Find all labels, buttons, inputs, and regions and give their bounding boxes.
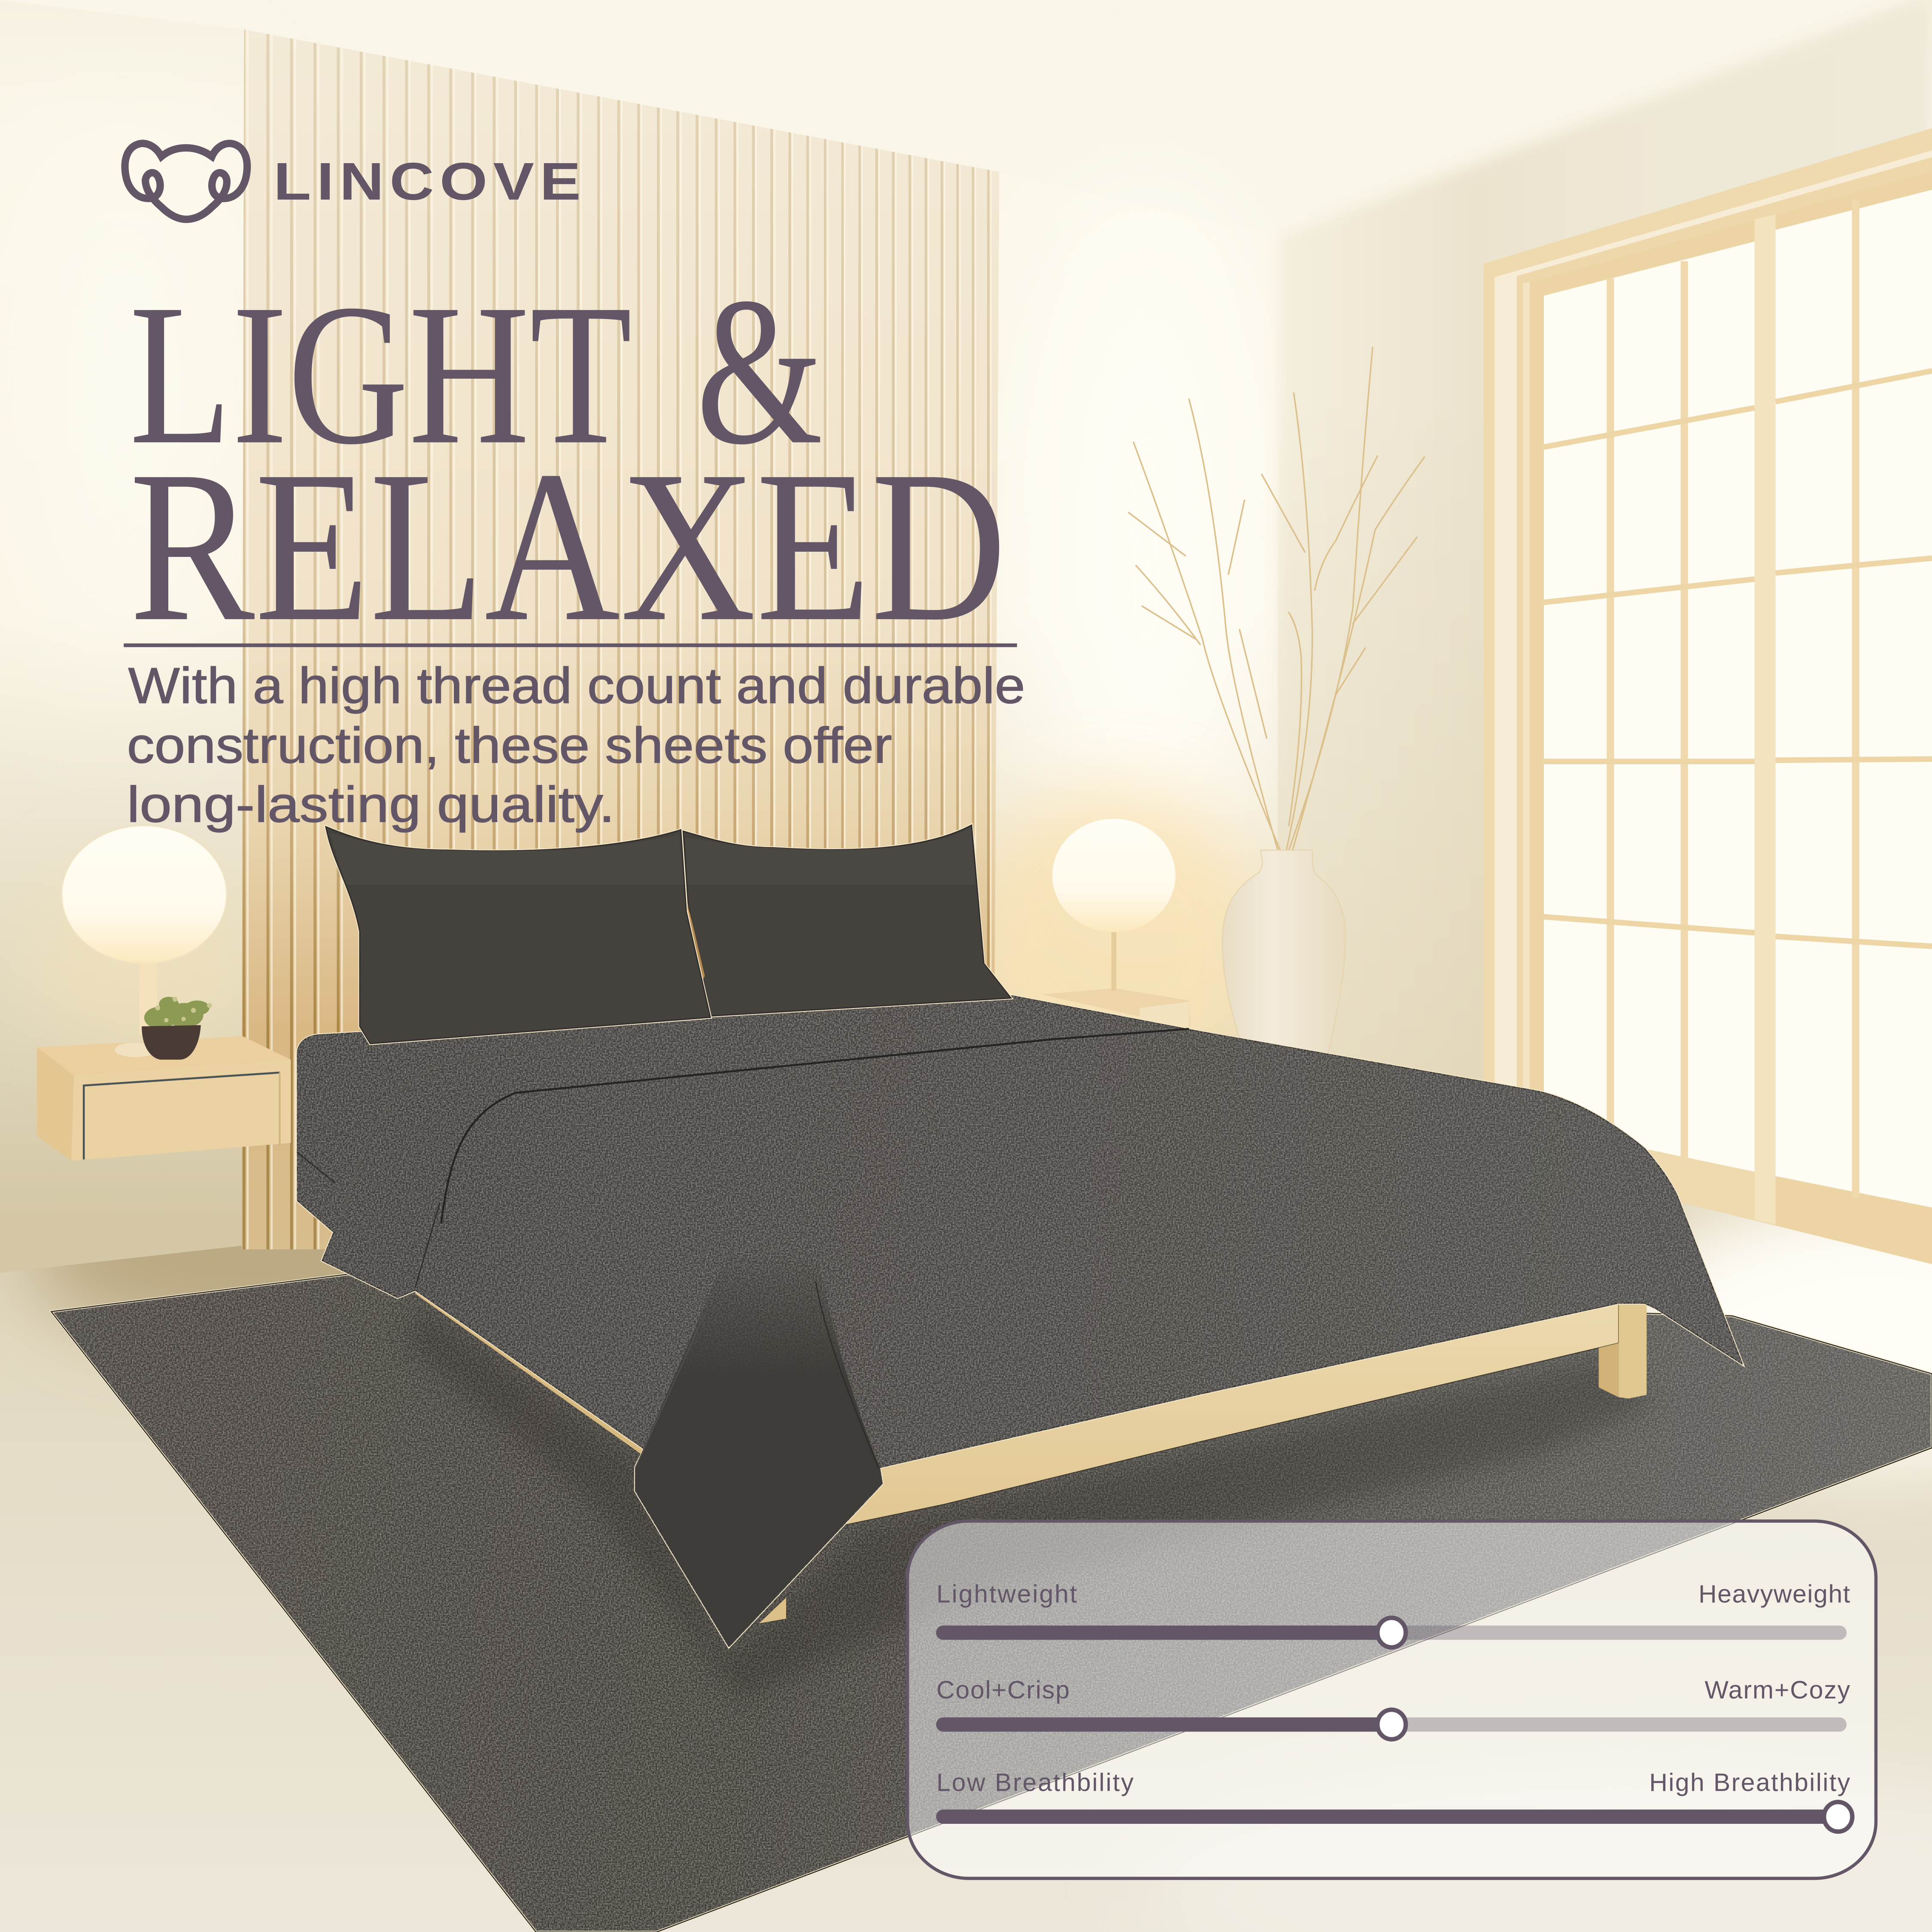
title: RELAXED (129, 426, 1007, 666)
branches (1129, 347, 1425, 850)
slider: weight: Heavyweight (1698, 1580, 1850, 1608)
background: right wall (1278, 0, 1932, 1282)
pillow right (683, 825, 1011, 1016)
front drape (635, 1244, 882, 1646)
fold lines (297, 1025, 1682, 1467)
description text: long-lasting quality. (127, 776, 615, 832)
logo mark (125, 143, 247, 219)
right lamp (1052, 819, 1176, 990)
duvet and sheets (297, 996, 1742, 1646)
title: LIGHT (129, 262, 632, 486)
gap between pillows (685, 896, 705, 981)
slider: temperature: Cool+Crisp (936, 1676, 1069, 1704)
window: mullions (1610, 200, 1856, 1198)
logo wordmark: LINCOVE (273, 152, 586, 211)
vase body (1222, 850, 1346, 1054)
background: ceiling (0, 0, 1932, 237)
title: & (696, 253, 823, 488)
slider: temperature (936, 1676, 1850, 1739)
panel background (908, 1521, 1876, 1878)
slider: breathability: Low Breathbility (936, 1768, 1134, 1796)
window: left sash panes (1544, 241, 1755, 1172)
front rail (843, 1303, 1619, 1525)
window: centre stile (1755, 214, 1776, 1225)
foreground foot (759, 1598, 786, 1623)
bed shadow on rug (407, 1306, 1651, 1700)
description text (127, 657, 1025, 832)
background: left wall (0, 0, 1932, 1355)
panel: fabric property sliders (908, 1521, 1876, 1878)
slider: weight: Lightweight (936, 1580, 1077, 1608)
leg (1599, 1343, 1619, 1397)
left side rail (415, 1288, 644, 1456)
window: frame and shoji panes (1483, 128, 1932, 1264)
slider: breathability (936, 1768, 1852, 1832)
slider: weight (936, 1580, 1850, 1647)
slider: temperature: Warm+Cozy (1705, 1676, 1850, 1704)
description text: With a high thread count and durable (128, 657, 1025, 714)
potted plant (142, 997, 212, 1060)
rug (51, 1274, 1932, 1932)
description text: construction, these sheets offer (127, 717, 892, 773)
bed frame (415, 1288, 1646, 1623)
title rule (124, 644, 1017, 647)
logo (125, 143, 586, 219)
left lamp (61, 826, 227, 1057)
title (129, 253, 1007, 666)
pillow left (326, 827, 710, 1044)
window: right sash panes (1776, 190, 1932, 1207)
floor vase with dried branches (1129, 347, 1425, 1054)
floor (0, 1170, 1932, 1932)
slider: breathability: High Breathbility (1649, 1768, 1850, 1796)
window: sill (1649, 1150, 1755, 1220)
wooden slat headboard wall (234, 24, 1010, 1257)
window: rails (1543, 371, 1932, 946)
right nightstand (1041, 988, 1190, 1027)
left nightstand (37, 1036, 291, 1160)
background: wall glows (21, 123, 1282, 1109)
